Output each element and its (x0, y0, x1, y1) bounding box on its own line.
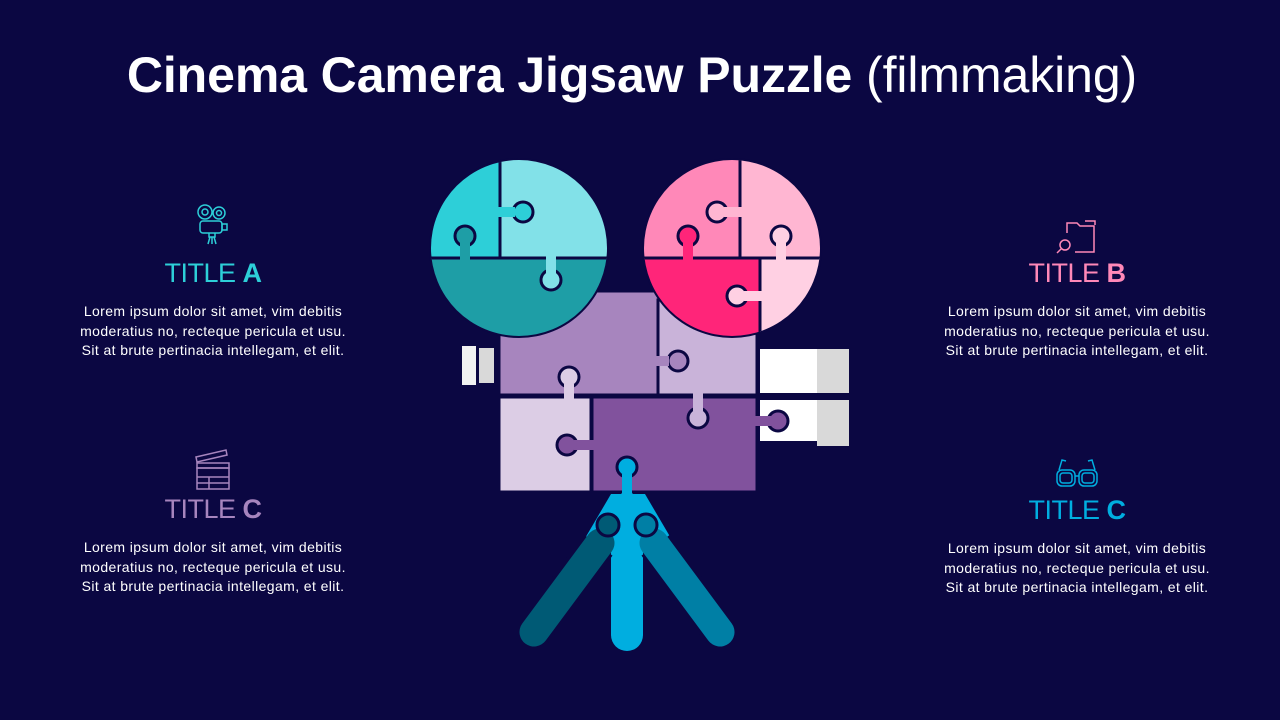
tripod (534, 478, 720, 635)
text block: title C right: moderatius no, recteque pericula et usu. (944, 560, 1210, 576)
text block: title B: moderatius no, recteque pericula et usu. (944, 322, 1210, 338)
text block: title B: TITLE B (1028, 258, 1126, 288)
text block: title A: TITLE A (164, 258, 262, 288)
text block: title B (944, 220, 1210, 358)
title: Cinema Camera Jigsaw Puzzle (filmmaking) (127, 47, 1137, 103)
text block: title C right: Lorem ipsum dolor sit amet, vim debitis (948, 540, 1206, 556)
icon: clapperboard (195, 449, 230, 490)
icon: folder search (1056, 220, 1096, 254)
text block: title C right (944, 459, 1210, 595)
text block: title C left: Sit at brute pertinacia intellegam, et elit. (82, 578, 344, 594)
text block: title A: Sit at brute pertinacia intellegam, et elit. (82, 342, 344, 358)
chart: camera jigsaw (431, 160, 849, 651)
text block: title C right: TITLE C (1028, 495, 1126, 525)
text block: title A (80, 204, 346, 358)
icon: 3d glasses (1056, 459, 1098, 487)
body pieces (499, 291, 788, 494)
text block: title A: Lorem ipsum dolor sit amet, vim debitis (84, 303, 342, 319)
text block: title C left: moderatius no, recteque pericula et usu. (80, 558, 346, 574)
left lens piece (462, 346, 494, 385)
text block: title A: moderatius no, recteque pericula et usu. (80, 322, 346, 338)
text block: title B: Lorem ipsum dolor sit amet, vim debitis (948, 303, 1206, 319)
text block: title B: Sit at brute pertinacia intellegam, et elit. (946, 342, 1208, 358)
right lens pieces (760, 349, 849, 446)
left reel (431, 160, 607, 338)
right reel (644, 160, 820, 338)
text block: title C left: TITLE C (164, 494, 262, 524)
icon: movie camera (197, 204, 228, 244)
text block: title C left: Lorem ipsum dolor sit amet, vim debitis (84, 539, 342, 555)
text block: title C left (80, 449, 346, 594)
text block: title C right: Sit at brute pertinacia intellegam, et elit. (946, 579, 1208, 595)
